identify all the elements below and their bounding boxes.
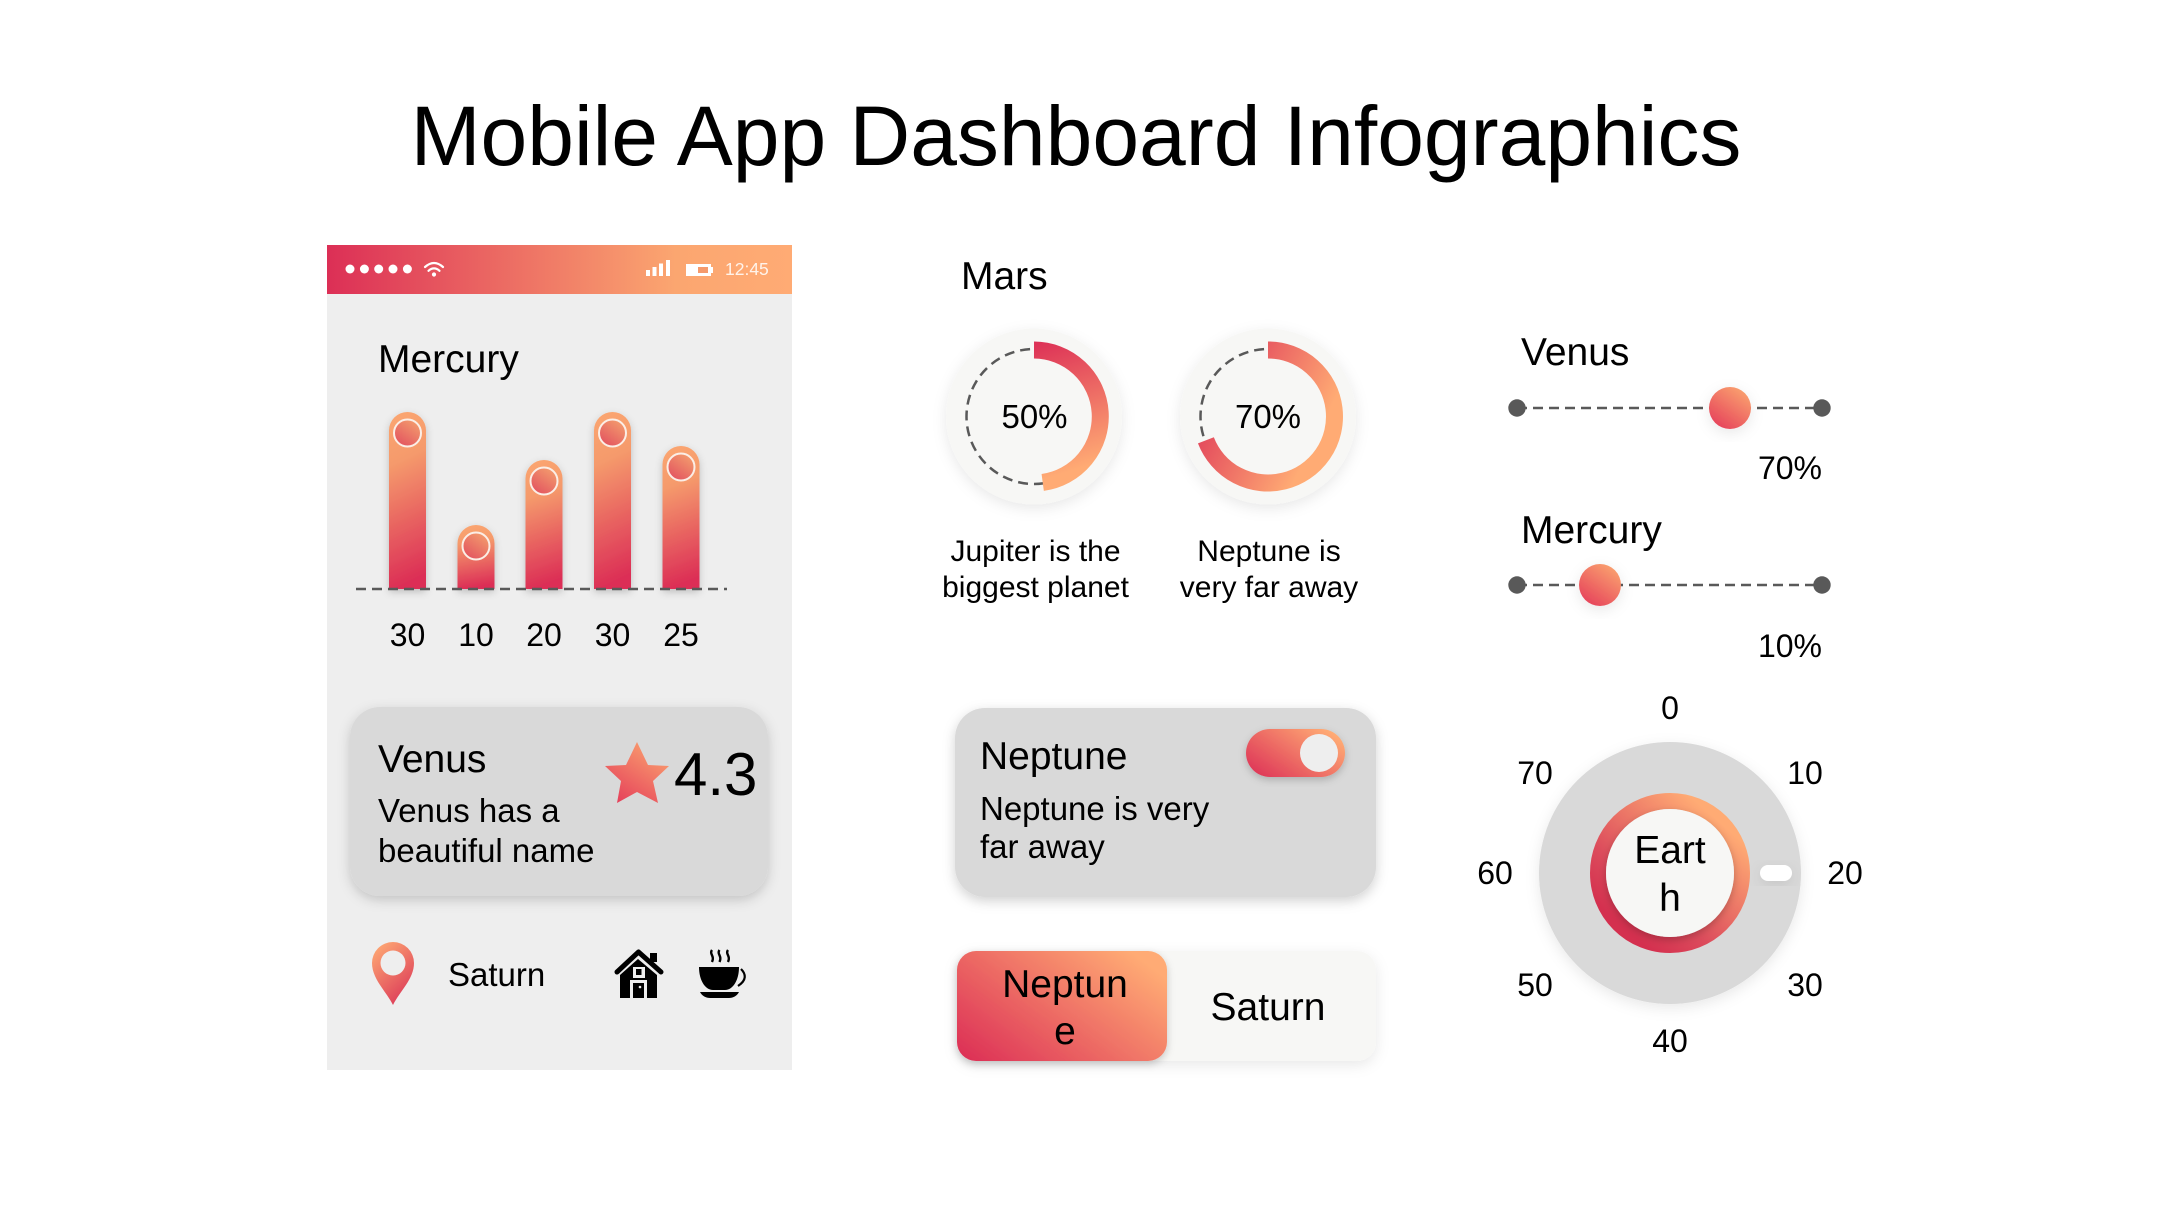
- slider knob: [1579, 564, 1621, 606]
- dial scale: 20: [1827, 855, 1863, 891]
- active label: e: [1054, 1010, 1076, 1053]
- icon: wifi: [425, 263, 443, 276]
- inactive segment: [957, 951, 1376, 1061]
- rating: 4.3: [674, 741, 757, 808]
- icon: coffee cup: [699, 950, 745, 998]
- slider knob: [1709, 387, 1751, 429]
- donut: 70%: [1180, 328, 1356, 504]
- dial scale: 40: [1652, 1023, 1688, 1059]
- location label: Saturn: [448, 956, 545, 993]
- active label: Neptun: [1002, 963, 1128, 1006]
- dial: Earth: [1477, 690, 1863, 1059]
- dial scale: 0: [1661, 690, 1679, 726]
- dial base: [1539, 742, 1801, 1004]
- donut base: [1180, 328, 1356, 504]
- card heading: Neptune: [980, 735, 1127, 778]
- icon: signal dots: [346, 264, 412, 274]
- toggle switch: [1246, 729, 1345, 777]
- card background: [350, 707, 768, 896]
- bar 4: [594, 412, 631, 589]
- clock: 12:45: [725, 259, 769, 279]
- donut caption 1: biggest planet: [942, 571, 1130, 604]
- bar labels: 25: [663, 617, 699, 653]
- dial centre label: Eart: [1634, 829, 1706, 872]
- donut caption 2: [1180, 535, 1358, 604]
- phone background: [327, 245, 792, 1070]
- value: 50%: [1001, 398, 1068, 435]
- donut: 50%: [946, 328, 1122, 504]
- dial centre label: [1634, 829, 1706, 920]
- card text: far away: [980, 828, 1105, 865]
- value: 70%: [1235, 398, 1301, 435]
- panel: Mars progress: [942, 255, 1358, 604]
- card heading: Venus: [378, 738, 486, 781]
- status bar background: [327, 245, 792, 294]
- donut caption 1: [942, 535, 1130, 604]
- slider: Mercury: [1508, 509, 1831, 664]
- card background: [955, 708, 1376, 897]
- dial centre: [1606, 809, 1734, 937]
- heading: Mars: Mars: [961, 255, 1048, 298]
- icon: star: [605, 742, 669, 803]
- status bar: [327, 245, 792, 294]
- dial scale: 30: [1787, 967, 1823, 1003]
- heading: Mercury: Mercury: [378, 338, 519, 381]
- card text: Neptune is very: [980, 790, 1210, 827]
- card text: [378, 792, 594, 869]
- bar labels: 10: [458, 617, 494, 653]
- slider: Venus: [1508, 331, 1831, 486]
- card text: [980, 790, 1210, 865]
- dial ring: [1598, 801, 1742, 945]
- icon: signal bars: [646, 260, 670, 276]
- dial pointer: [1760, 865, 1792, 881]
- card: Venus rating: [350, 707, 768, 896]
- icon: battery: [686, 264, 713, 276]
- card: Neptune toggle: [955, 708, 1376, 897]
- icon: location pin: [372, 942, 414, 1005]
- dial scale: 70: [1517, 755, 1553, 791]
- inactive label: Saturn: [1211, 986, 1325, 1029]
- donut caption 2: very far away: [1180, 571, 1358, 604]
- bar labels: 30: [595, 617, 630, 653]
- donut base: [946, 328, 1122, 504]
- bar labels: 20: [526, 617, 562, 653]
- slider label: Mercury: [1521, 509, 1662, 552]
- dial scale: 10: [1787, 755, 1823, 791]
- progress ring: [1206, 350, 1334, 483]
- slider value: 10%: [1758, 628, 1822, 664]
- progress ring: [1034, 350, 1100, 482]
- bar 1: [389, 412, 426, 589]
- dial scale: [1477, 690, 1863, 1059]
- icon: house: [617, 952, 661, 998]
- dial centre label: h: [1659, 877, 1681, 920]
- bar 3: [526, 460, 562, 589]
- card text: Venus has a: [378, 792, 560, 829]
- bar 5: [662, 446, 700, 589]
- donut caption 1: Jupiter is the: [950, 535, 1121, 568]
- slider track: [1508, 399, 1831, 417]
- donut caption 2: Neptune is: [1197, 535, 1341, 568]
- bar 2: [458, 525, 494, 589]
- dial scale: 50: [1517, 967, 1553, 1003]
- panel: phone dashboard: [327, 245, 792, 1070]
- title: Mobile App Dashboard Infographics: [411, 89, 1741, 183]
- active segment: [957, 951, 1167, 1061]
- card text: beautiful name: [378, 832, 594, 869]
- active label: [1002, 963, 1128, 1053]
- dial scale: 60: [1477, 855, 1513, 891]
- slider track: [1508, 576, 1831, 594]
- slider label: Venus: [1521, 331, 1629, 374]
- bar chart: [356, 412, 727, 653]
- slider value: 70%: [1758, 450, 1822, 486]
- segmented control: [957, 951, 1376, 1061]
- bar labels: [390, 617, 699, 653]
- bar labels: 30: [390, 617, 425, 653]
